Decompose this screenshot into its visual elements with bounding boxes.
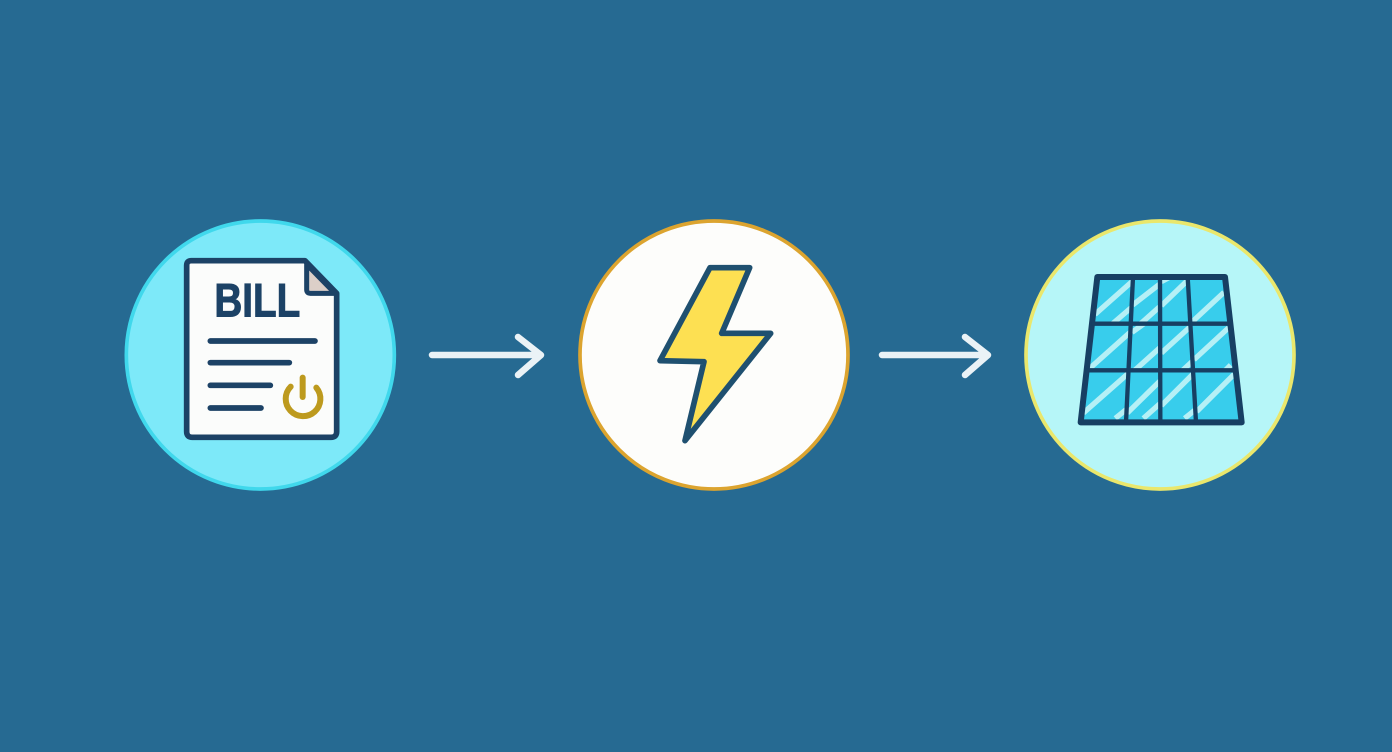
icon: bill document in cyan circle — [126, 221, 394, 489]
icon: solar panel in pale circle — [1026, 221, 1294, 489]
glass reflections — [1083, 277, 1234, 418]
icon: power symbol — [286, 378, 320, 416]
folded corner — [307, 264, 335, 293]
document page — [187, 261, 337, 437]
solar panel glass — [1081, 277, 1242, 422]
solar panel frame and grid — [1081, 277, 1242, 422]
heading: BILL: BILL — [214, 273, 300, 326]
text lines on bill — [210, 341, 315, 408]
icon: lightning bolt in white circle — [580, 221, 848, 489]
arrow: electricity to solar — [882, 337, 988, 375]
lightning bolt — [660, 268, 771, 441]
arrow: bill to electricity — [432, 337, 541, 375]
